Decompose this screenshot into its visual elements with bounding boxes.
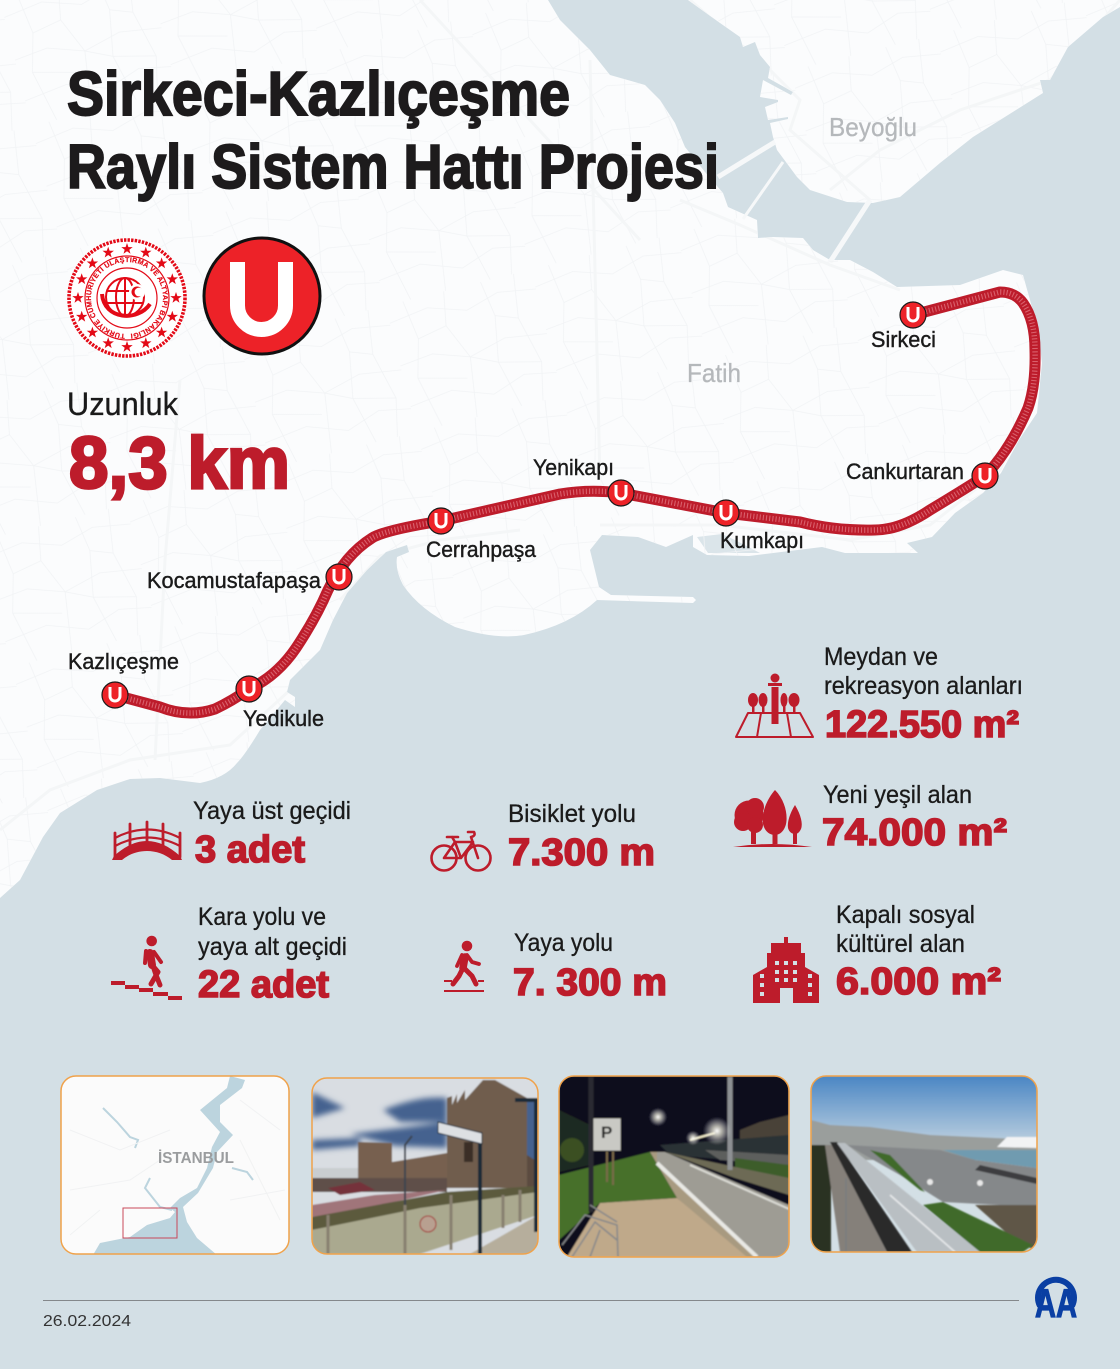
station: Kumkapı [713, 500, 739, 526]
stat: Kara yolu ve yaya alt geçidi: yaya alt geçidi [198, 933, 347, 961]
logo: U metro roundel [204, 238, 320, 354]
icon: footbridge [112, 822, 182, 860]
icon: square with statue and trees [736, 674, 813, 737]
station labels: Kumkapı [720, 528, 804, 553]
bike rack [562, 1205, 618, 1257]
route line [115, 292, 1035, 713]
station: Yenikapı [608, 480, 634, 506]
stat: Yaya üst geçidi [112, 797, 351, 871]
label: Uzunluk: Uzunluk [67, 386, 179, 422]
roofs and walkway [328, 1182, 375, 1195]
stat: Bisiklet yolu [432, 800, 655, 874]
station: Cerrahpaşa [428, 508, 454, 534]
path [650, 1152, 760, 1257]
grass [923, 1202, 1033, 1252]
stat: Yeni yeşil alan [733, 781, 1007, 854]
district: Fatih: Fatih [687, 358, 741, 388]
value: 8,3 km: 8,3 km [69, 423, 290, 504]
road area [847, 1145, 1037, 1205]
icon: building [753, 937, 819, 1003]
stat: Yeni yeşil alan: Yeni yeşil alan [823, 781, 972, 809]
logo: AA: AA [1035, 1282, 1077, 1326]
map: land [0, 0, 1120, 898]
icon: bicycle [432, 832, 490, 870]
water: inland streams [103, 1108, 253, 1210]
stat: Kara yolu ve yaya alt geçidi: 22 adet [198, 964, 329, 1006]
lower ground and vegetation [811, 1145, 831, 1252]
station: Sirkeci [900, 302, 926, 328]
stations [102, 302, 998, 708]
map: streets [0, 0, 1120, 900]
stat: Meydan ve rekreasyon alanları: Meydan ve [824, 643, 938, 671]
stat: Meydan ve rekreasyon alanları: 122.550 m² [825, 704, 1019, 746]
footer rule [43, 1300, 1019, 1301]
water: Kumkapı harbour [697, 534, 760, 553]
buildings and fence [738, 1114, 788, 1140]
photo: railway from above [811, 1076, 1037, 1252]
major roads [0, 0, 1120, 830]
station labels: Yedikule [243, 706, 324, 731]
district: Beyoğlu: Beyoğlu [829, 112, 917, 142]
station labels: Cankurtaran [846, 459, 964, 484]
poles and lights [728, 1077, 732, 1170]
station labels: Kocamustafapaşa [147, 568, 322, 593]
stat: Yaya üst geçidi: 3 adet [195, 829, 305, 871]
castle tower [447, 1080, 527, 1188]
station: Yedikule [236, 676, 262, 702]
stat: Kapalı sosyal kültürel alan: Kapalı sosyal [836, 901, 975, 929]
sea [943, 1150, 1037, 1168]
stat: Bisiklet yolu: 7.300 m [508, 832, 655, 874]
logo: ministry seal: TÜRKİYE CUMHURİYETİ ULAŞTIRMA VE ALTYAPI BAKANLIĞI [86, 257, 168, 339]
district labels [687, 112, 917, 388]
title [67, 60, 719, 202]
poles and sign [405, 1136, 412, 1205]
icon: trees [733, 790, 812, 847]
stat: Meydan ve rekreasyon alanları [736, 643, 1023, 746]
station: Kazlıçeşme [102, 682, 128, 708]
land: Beyoğlu [688, 0, 1120, 203]
land: historic peninsula [0, 0, 1042, 898]
station: Cankurtaran [972, 463, 998, 489]
date: 26.02.2024 [43, 1313, 131, 1330]
parking sign [593, 1118, 621, 1151]
stat: Yeni yeşil alan: 74.000 m² [822, 812, 1007, 854]
photo: night cycling path [559, 1076, 789, 1257]
station labels: Cerrahpaşa [426, 537, 537, 562]
title: Raylı Sistem Hattı Projesi [67, 133, 719, 202]
bridge: Atatürk [743, 162, 783, 219]
stat: Yaya yolu [444, 929, 667, 1004]
length stat [67, 386, 290, 504]
street texture [0, 0, 1120, 900]
concrete [567, 1198, 747, 1257]
photo: castle walls [312, 1078, 538, 1254]
stat: Kapalı sosyal kültürel alan [753, 901, 1001, 1003]
bridges [718, 142, 870, 262]
station: Kocamustafapaşa [326, 564, 352, 590]
station labels: Sirkeci [871, 327, 936, 352]
tracks [825, 1145, 887, 1252]
water: Bosphorus and Marmara [93, 1076, 245, 1255]
title: Sirkeci-Kazlıçeşme [67, 60, 570, 129]
stat: Kara yolu ve yaya alt geçidi [111, 903, 347, 1006]
stat: Meydan ve rekreasyon alanları: rekreasyon alanları [824, 672, 1023, 700]
stat: Yaya yolu: Yaya yolu [514, 929, 613, 957]
locator map [61, 1076, 289, 1255]
photo: night cycling path: P [601, 1123, 612, 1142]
icon: person descending stairs [111, 936, 182, 1000]
stat: Kapalı sosyal kültürel alan: kültürel alan [836, 930, 965, 958]
stat: Kara yolu ve yaya alt geçidi: Kara yolu ve [198, 903, 326, 931]
station labels: Kazlıçeşme [68, 649, 179, 674]
stat: Yaya üst geçidi: Yaya üst geçidi [193, 797, 351, 825]
station labels [68, 327, 964, 731]
stat: Kapalı sosyal kültürel alan: 6.000 m² [836, 961, 1001, 1003]
icon: pedestrian [444, 941, 484, 992]
project area rectangle [123, 1208, 177, 1238]
stat: Yaya yolu: 7. 300 m [513, 962, 667, 1004]
town skyline [811, 1120, 1037, 1160]
grass [559, 1152, 677, 1240]
label: İSTANBUL: İSTANBUL [158, 1149, 234, 1167]
logo: ministry seal [67, 238, 187, 358]
station labels: Yenikapı [533, 455, 614, 480]
stat: Bisiklet yolu: Bisiklet yolu [508, 800, 636, 828]
